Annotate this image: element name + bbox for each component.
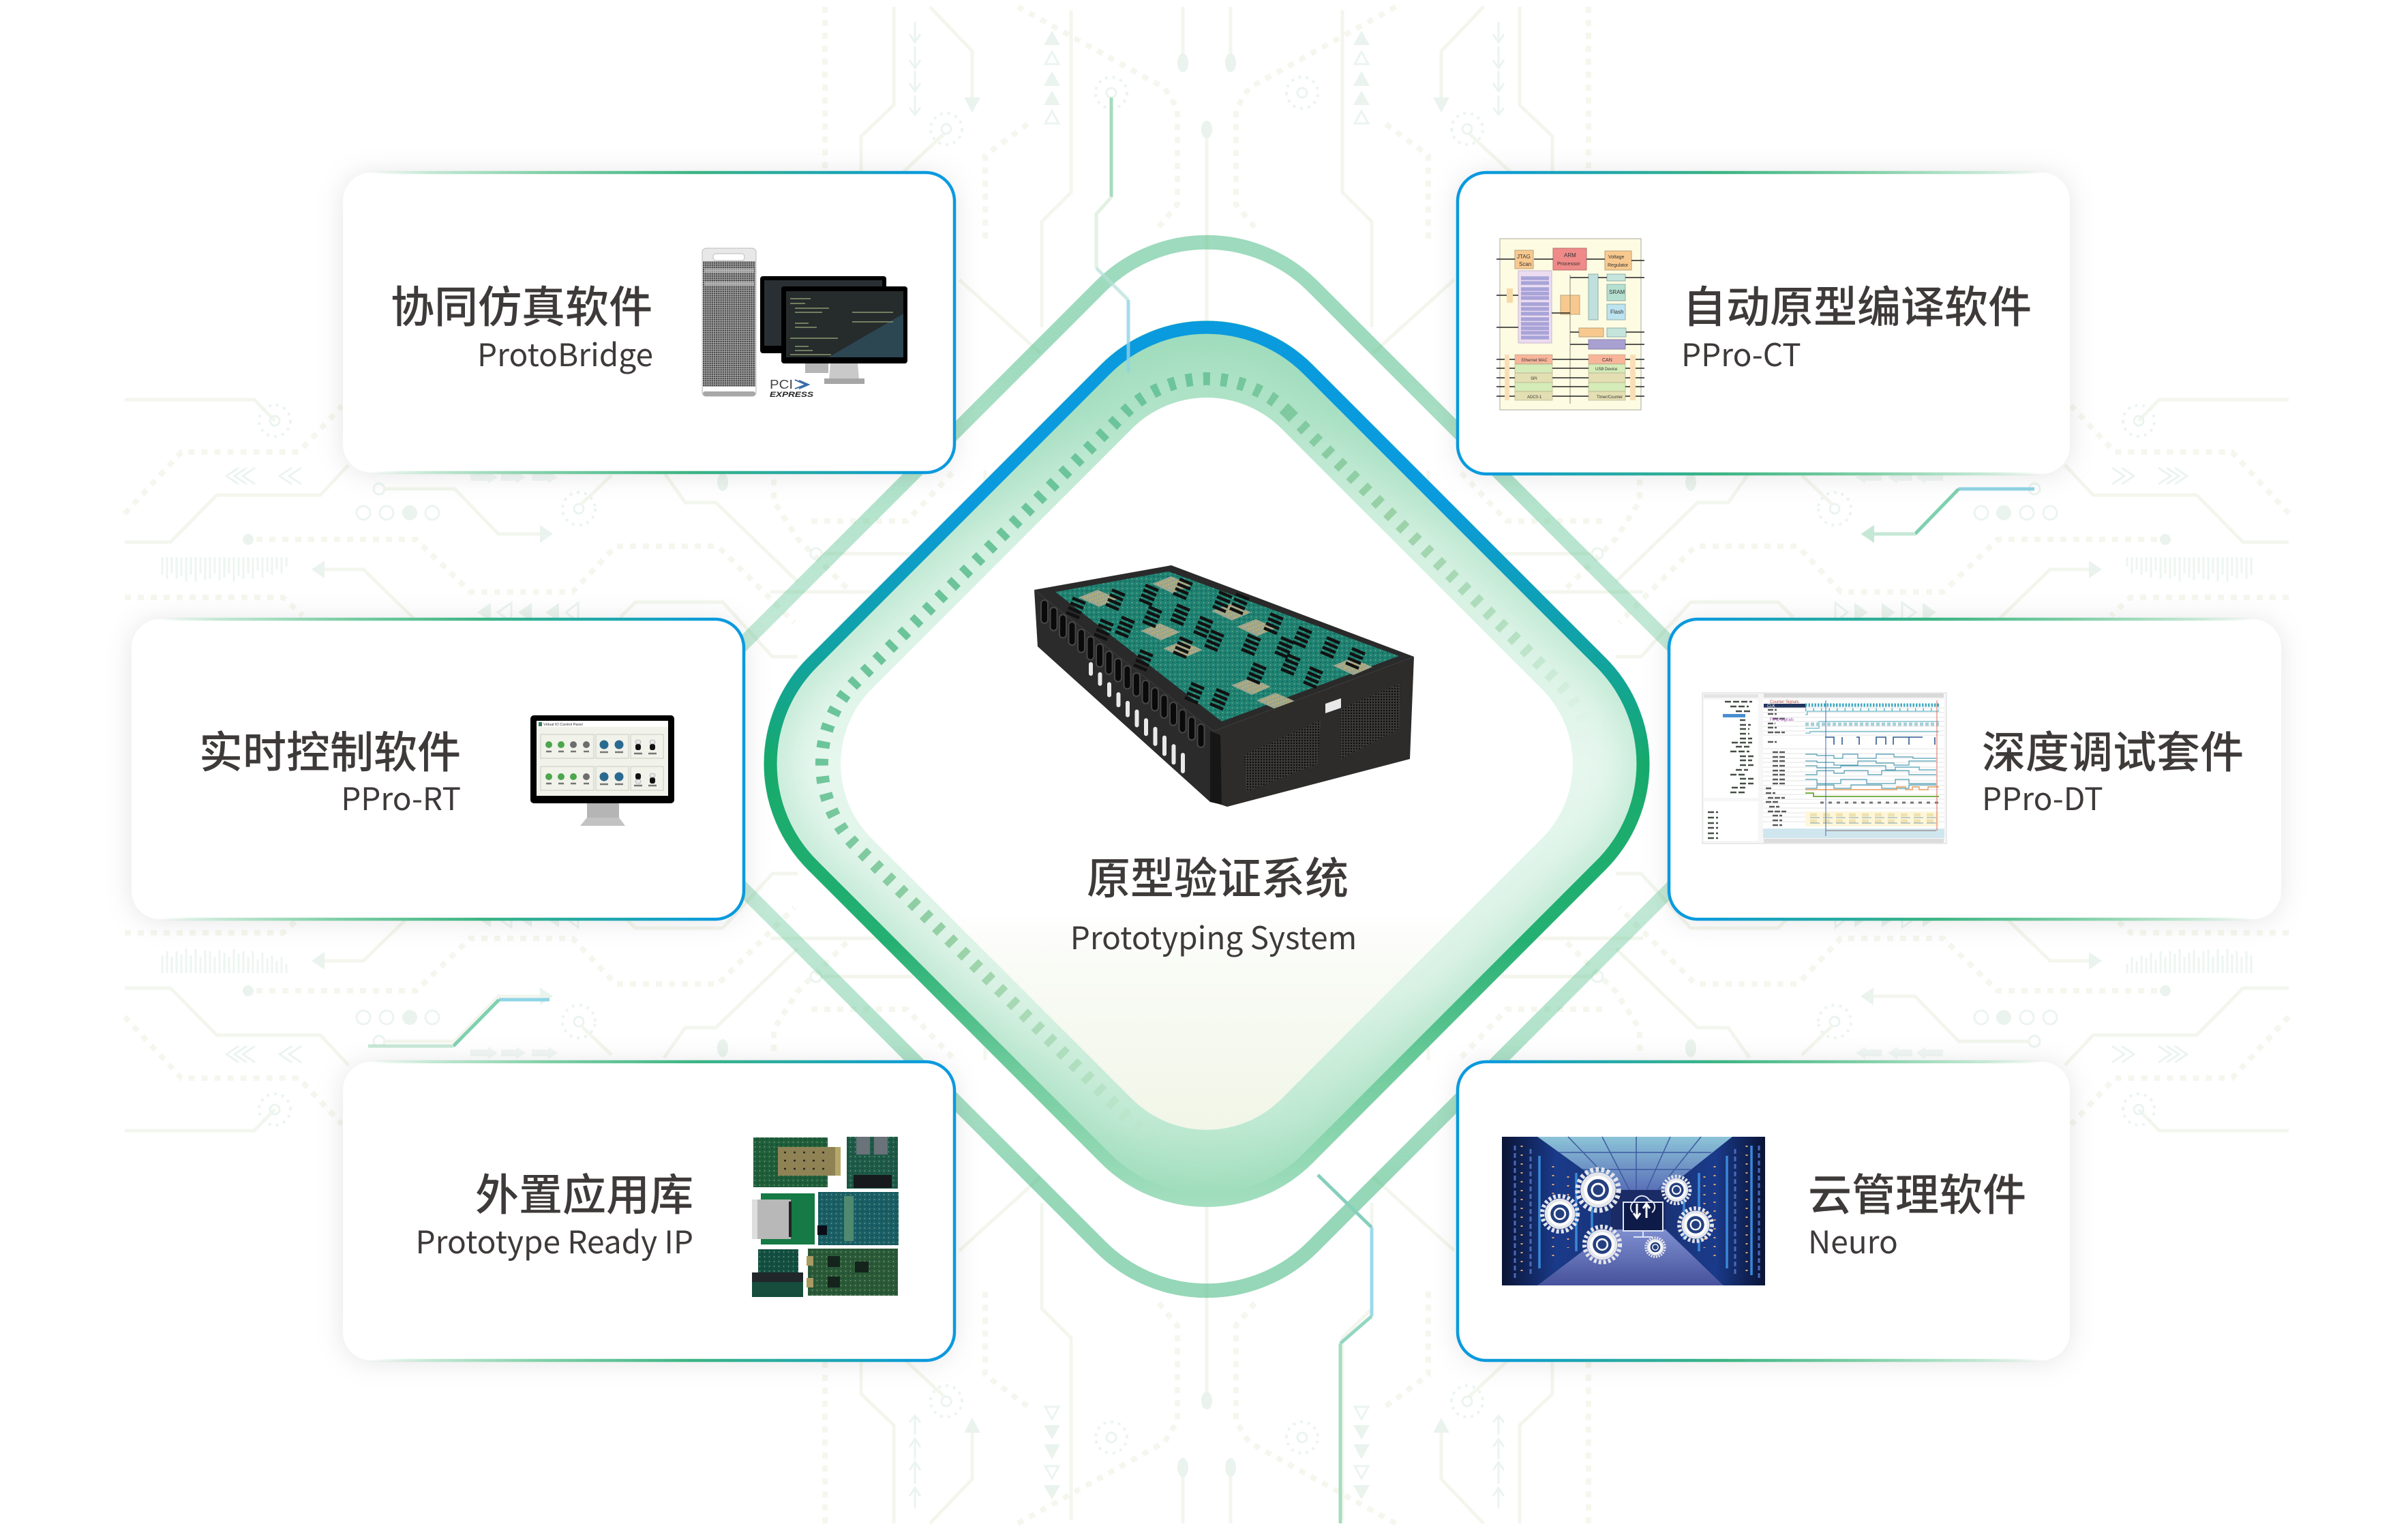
image: SoC block diagram: Timer/Counter	[1597, 396, 1623, 400]
card: PPro-DT	[1669, 619, 2281, 919]
image: workstation and monitors: PCI	[770, 378, 793, 391]
coloured trace: bottom	[1318, 1175, 1372, 1523]
diamond outer stroke	[711, 268, 1702, 1260]
image: monitor with control panel	[530, 715, 674, 826]
subheading: PPro-RT	[341, 775, 461, 820]
front handle	[1210, 731, 1222, 805]
white label	[1325, 698, 1341, 713]
server chassis photo	[1034, 565, 1414, 807]
image: SoC block diagram: Flash	[1610, 309, 1624, 315]
dashed ring	[774, 331, 1640, 1197]
heading: 实时控制软件	[199, 718, 461, 781]
heading: 深度调试套件	[1982, 718, 2244, 781]
image: waveform debugger	[1702, 693, 1946, 844]
coloured trace: upper right	[1861, 489, 2034, 543]
coloured trace: lower left	[368, 1000, 550, 1046]
green board	[1055, 571, 1399, 721]
chassis right face	[1209, 657, 1414, 807]
heading: 协同仿真软件	[391, 273, 652, 336]
image: SoC block diagram: Regulator	[1608, 263, 1629, 268]
diamond band fill	[702, 258, 1712, 1269]
central diamond	[764, 321, 1650, 1207]
image: data center with gears	[1502, 1137, 1765, 1285]
image: SoC block diagram: Scan	[1519, 261, 1531, 267]
subheading: PPro-CT	[1681, 331, 1801, 376]
chassis top rim	[1034, 565, 1414, 731]
subheading: Prototype Ready IP	[416, 1218, 693, 1263]
card: Neuro	[1458, 1062, 2070, 1360]
chassis left face	[1034, 590, 1214, 802]
center heading	[1070, 844, 1357, 959]
subheading: PPro-DT	[1982, 775, 2103, 820]
heading: 外置应用库	[475, 1161, 693, 1223]
center subheading: Prototyping System	[1070, 914, 1357, 959]
image: monitor with control panel: Virtual IO Control Panel	[543, 723, 583, 727]
image: daughter boards	[752, 1137, 899, 1297]
band inner glow	[764, 321, 1650, 1207]
gold chips	[1079, 576, 1372, 710]
coloured trace: top	[1096, 98, 1128, 372]
image: SoC block diagram: CAN	[1602, 358, 1612, 363]
card: PPro-CT	[1458, 173, 2070, 474]
image: SoC block diagram: Voltage	[1608, 255, 1624, 260]
outer light green ring	[620, 180, 1793, 1353]
card: Prototype Ready IP	[343, 1062, 954, 1360]
slot rims	[1044, 603, 1201, 744]
image: SoC block diagram: Processor	[1557, 260, 1580, 267]
image: waveform debugger: CLK	[1767, 704, 1775, 709]
image: SoC block diagram: Ethernet MAC	[1522, 359, 1548, 363]
mesh panels	[1244, 683, 1400, 792]
lower slots	[1091, 664, 1183, 771]
image: SoC block diagram: SRAM	[1609, 289, 1625, 295]
heading: 云管理软件	[1808, 1161, 2026, 1223]
image: SoC block diagram: ARM	[1564, 252, 1576, 258]
card: ProtoBridge	[343, 173, 954, 473]
image: waveform debugger: Counter Signals	[1770, 700, 1799, 704]
image: waveform debugger: FIFO Signals	[1770, 718, 1794, 722]
image: SoC block diagram: ADC0-1	[1527, 396, 1542, 400]
image: workstation and monitors	[702, 248, 907, 399]
subheading: ProtoBridge	[477, 331, 653, 376]
image: SoC block diagram	[1496, 239, 1644, 410]
heading: 自动原型编译软件	[1683, 273, 2032, 336]
subheading: Neuro	[1808, 1218, 1898, 1263]
image: SoC block diagram: USB Device	[1595, 368, 1618, 372]
image: workstation and monitors: EXPRESS	[770, 391, 814, 399]
center heading: 原型验证系统	[1087, 844, 1349, 907]
inner white panel	[797, 354, 1616, 1174]
black connectors	[1066, 579, 1365, 709]
side slots	[1044, 603, 1201, 744]
image: SoC block diagram: SPI	[1531, 377, 1537, 381]
card: PPro-RT	[132, 619, 744, 919]
image: SoC block diagram: JTAG	[1517, 254, 1531, 260]
